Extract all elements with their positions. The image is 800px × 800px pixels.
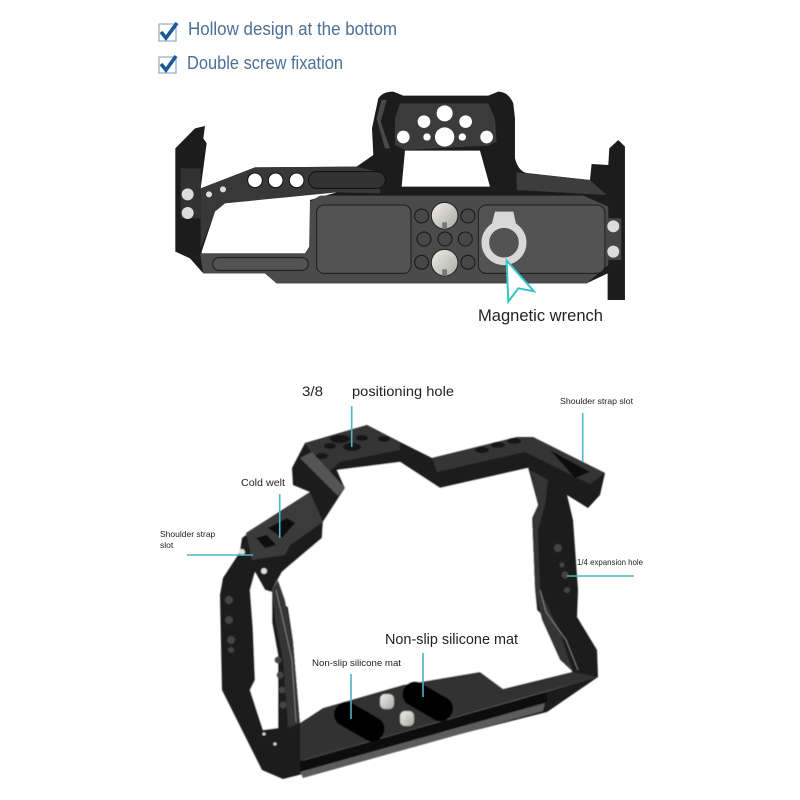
- side screws: [182, 188, 619, 258]
- checklist item: hollow design: Hollow design at the bottom: [188, 19, 397, 39]
- base plate: [200, 196, 608, 283]
- corner pins: [262, 732, 276, 746]
- top bracket face: [395, 103, 497, 150]
- left grip gap: [250, 572, 278, 730]
- label: shoulder strap slot left: Shoulder strap: [160, 529, 216, 539]
- top view of cage, bottom plate facing viewer: [175, 92, 625, 302]
- label: large silicone mat: Non-slip silicone mat: [385, 631, 519, 648]
- centre small holes: [415, 209, 475, 269]
- rail holes and slot: [206, 172, 385, 197]
- base plate top face: [300, 672, 598, 761]
- teal leader lines: [187, 406, 634, 719]
- cage silhouette: [175, 92, 625, 300]
- right end column: [607, 218, 621, 260]
- perspective view of cage: [220, 425, 605, 779]
- window openings: [202, 151, 490, 253]
- cage silhouette: [220, 425, 605, 779]
- icon: magnetic wrench ring: [485, 212, 523, 261]
- left end column: [181, 168, 201, 218]
- label: small silicone mat: Non-slip silicone mat: [312, 658, 401, 669]
- label: magnetic wrench: Magnetic wrench: [478, 306, 603, 325]
- cold shoe and strap slots: [239, 450, 590, 574]
- raised top faces: [272, 425, 605, 728]
- double fixation screws: [431, 202, 458, 276]
- top holes: [316, 435, 521, 459]
- label: shoulder strap slot right: Shoulder strap slot: [560, 396, 634, 406]
- cold shoe plate: [246, 492, 323, 560]
- label: 3/8: 3/8: [302, 383, 323, 399]
- bracket side highlight: [377, 100, 390, 148]
- feature checklist: [159, 19, 397, 73]
- labels for perspective view: [160, 383, 643, 669]
- label: expansion hole: 1/4 expansion hole: [577, 557, 643, 567]
- side grip holes: [225, 544, 570, 708]
- base plate recessed panels: [213, 205, 605, 273]
- base plate grey lip: [300, 703, 545, 778]
- label: cold welt: Cold welt: [241, 477, 285, 489]
- base plate black band: [300, 692, 547, 772]
- rail and side shading: [201, 167, 380, 248]
- bracket holes: [397, 105, 493, 147]
- base screws: [380, 694, 414, 726]
- arrow: points to wrench: [507, 261, 534, 302]
- checklist item: double screw: Double screw fixation: [187, 53, 343, 73]
- arm highlight: [300, 452, 345, 496]
- label: shoulder strap slot left: slot: [160, 540, 174, 550]
- label: positioning hole: positioning hole: [352, 383, 454, 399]
- silicone mats: [330, 677, 457, 746]
- grip edge highlights: [276, 590, 596, 760]
- main opening: [272, 462, 572, 723]
